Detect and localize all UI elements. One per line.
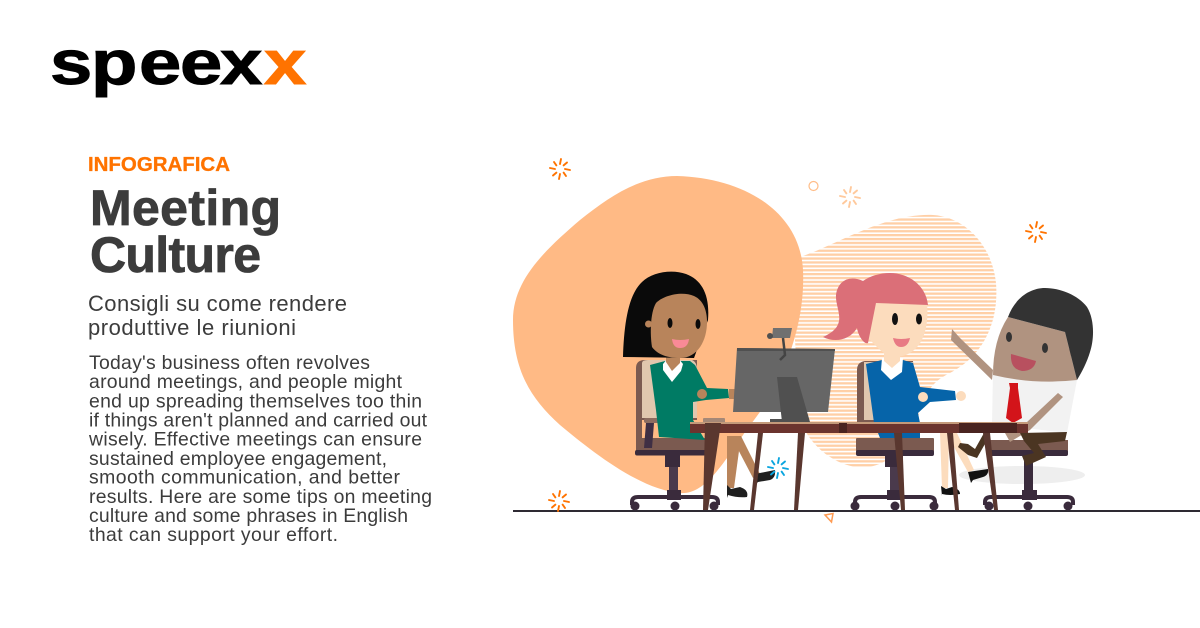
subtitle [88,291,347,340]
jacket [866,360,956,438]
chair: man [984,440,1073,510]
mouth [1011,354,1036,371]
lap arm [1005,393,1063,442]
ground line [513,510,1200,512]
decorative sparks and shapes [549,159,1046,522]
face [993,317,1077,382]
desk [690,422,1028,510]
hair [623,272,708,358]
title: Meeting [90,180,281,236]
eyes [1006,332,1048,353]
body text: sustained employee engagement, [89,448,387,470]
body text: that can support your effort. [89,524,338,546]
eyes [668,318,700,329]
shadow under man [959,466,1085,484]
subtitle: Consigli su come rendere [88,291,347,316]
eyebrow label: INFOGRAFICA [88,153,230,176]
figure: man with red tie [951,288,1093,510]
computer monitor with webcam [733,328,835,422]
trousers [1020,432,1067,466]
body text: around meetings, and people might [89,371,403,393]
title: Culture [90,227,261,283]
legs and shoes: blue woman [940,433,988,496]
neck [884,352,900,368]
mouth [893,338,910,347]
logo: speexx: speexx [50,28,307,97]
blue spark [768,458,788,478]
body text: if things aren't planned and carried out [89,410,428,432]
hands [918,391,966,402]
eyes [892,313,922,325]
subtitle: produttive le riunioni [88,315,296,340]
body text [88,352,432,546]
body text: smooth communication, and better [89,466,401,488]
body text: Today's business often revolves [89,352,370,374]
shirt [992,372,1077,433]
hair [823,273,928,343]
body text: culture and some phrases in English [89,505,408,527]
collar [663,358,683,382]
neck [666,350,680,371]
hair [1008,288,1093,380]
body text: wisely. Effective meetings can ensure [88,428,422,450]
tie [1006,383,1022,423]
face [651,294,707,358]
title [90,180,281,283]
orange background blob [513,176,803,493]
body text: results. Here are some tips on meeting [89,486,432,508]
jacket [650,361,729,440]
striped background blob [790,215,996,468]
hands [697,389,735,399]
collar [881,358,903,380]
legs and shoes: green woman [727,436,775,498]
chair: blue woman [850,361,938,510]
face [868,303,927,356]
body text: end up spreading themselves too thin [89,390,422,412]
mouth [672,339,689,348]
raised arm [951,329,993,380]
chair: green woman [630,360,725,510]
figure: woman in blue at desk [823,273,988,510]
figure: woman in green at desk [623,272,775,510]
